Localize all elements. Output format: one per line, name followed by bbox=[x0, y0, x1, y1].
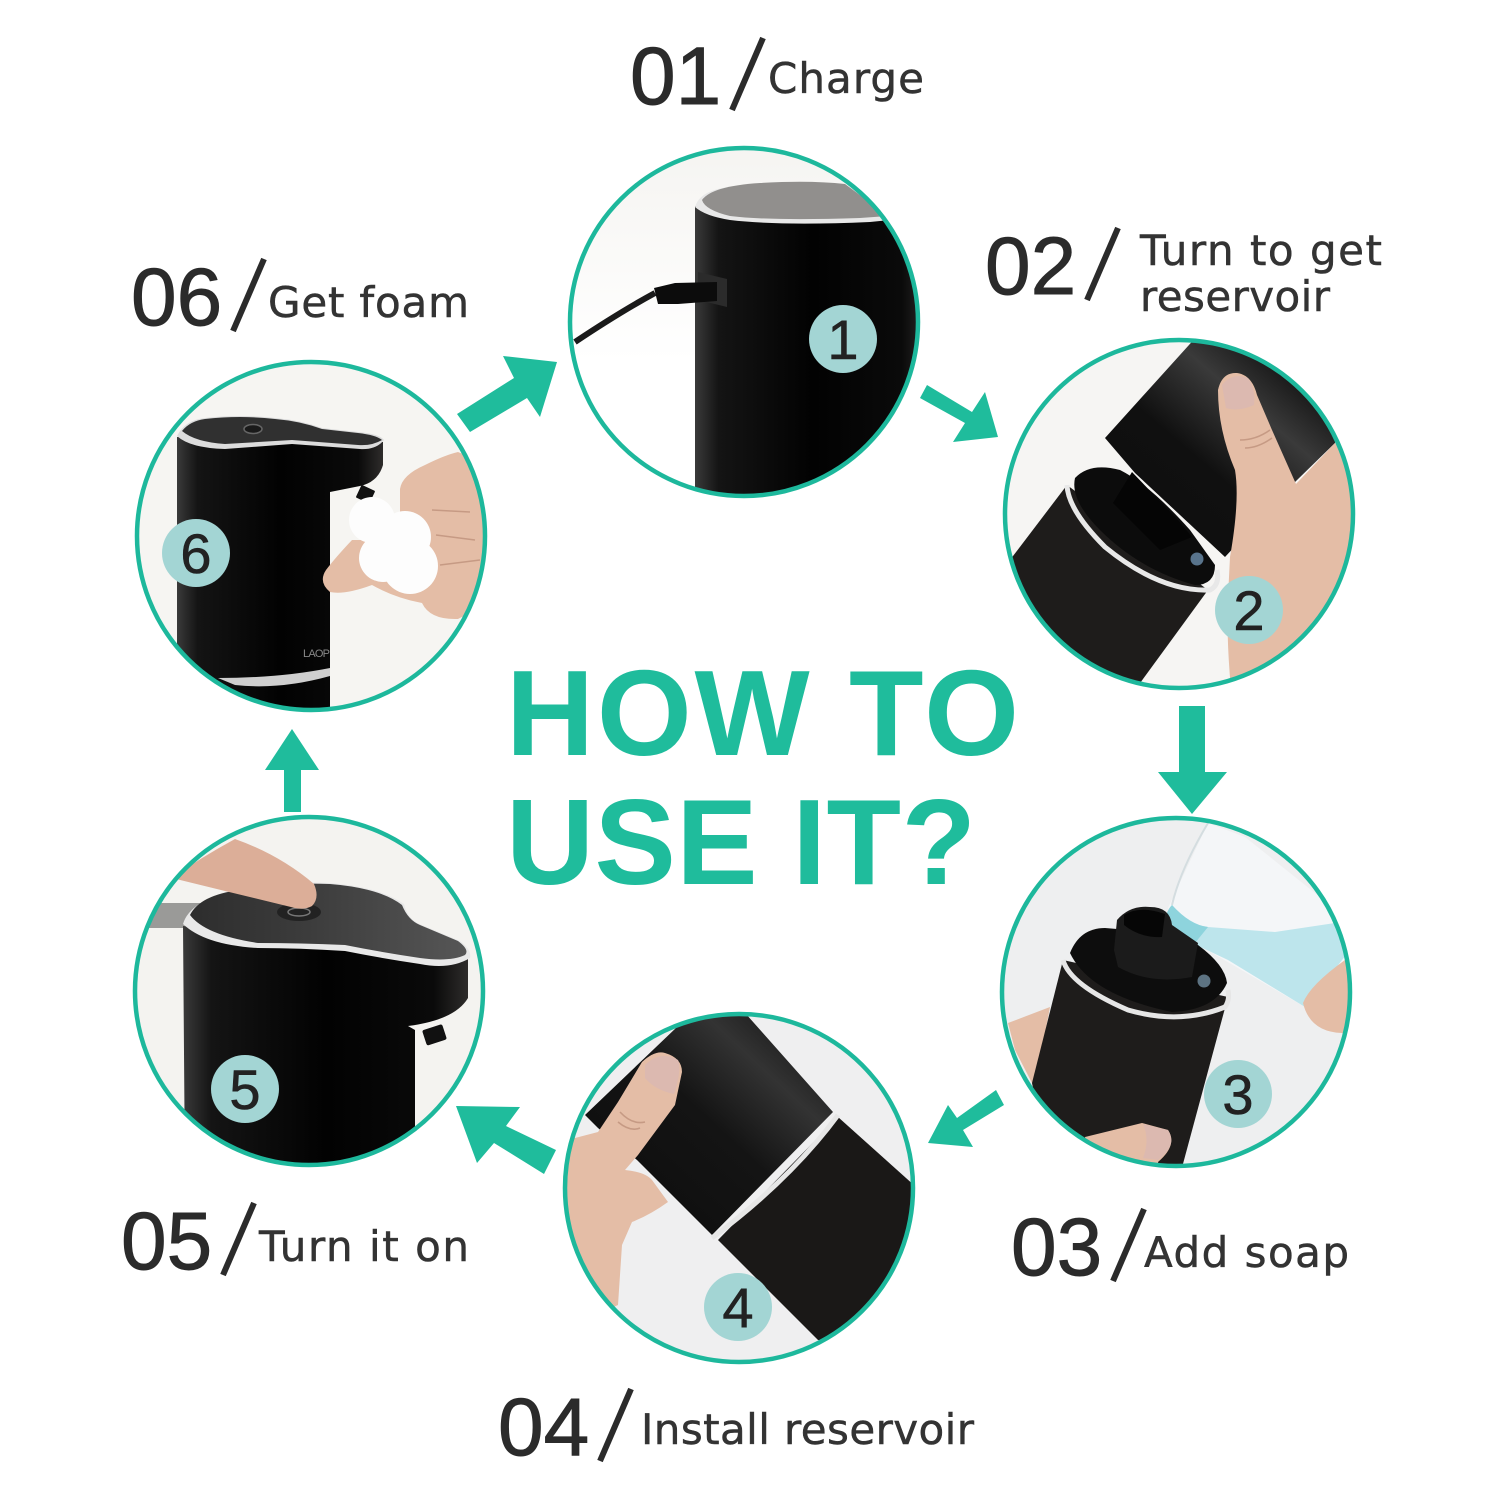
panel: step 3 add soap photo bbox=[1000, 815, 1360, 1175]
step 5 heading: 05 bbox=[121, 1196, 212, 1287]
arrow: step 4 to step 5 bbox=[456, 1106, 556, 1174]
step 6 heading bbox=[131, 252, 469, 343]
step 2 heading: 02 bbox=[985, 221, 1076, 312]
arrow: step 3 to step 4 bbox=[928, 1090, 1004, 1147]
step 2 heading bbox=[985, 221, 1382, 321]
title: how to use it bbox=[506, 645, 1019, 910]
title: how to use it: USE IT? bbox=[506, 774, 976, 910]
badge 4: 4 bbox=[722, 1276, 754, 1339]
badge 2 bbox=[1215, 576, 1283, 644]
step 4 heading: 04 bbox=[498, 1382, 589, 1473]
badge 6 bbox=[162, 519, 230, 587]
badge 3 bbox=[1204, 1060, 1272, 1128]
step 1 heading: Charge bbox=[768, 54, 924, 103]
step 4 heading: Install reservoir bbox=[641, 1405, 975, 1454]
step 1 heading bbox=[630, 31, 924, 122]
badge 1: 1 bbox=[827, 308, 859, 371]
step 4 heading bbox=[498, 1382, 975, 1473]
step 2 heading: reservoir bbox=[1140, 272, 1331, 321]
badge 4 bbox=[704, 1273, 772, 1341]
panel: step 5 turn on photo bbox=[130, 815, 490, 1180]
panel: step 4 install reservoir photo bbox=[555, 1005, 925, 1370]
step 3 heading: Add soap bbox=[1144, 1228, 1349, 1277]
arrow: step 6 to step 1 bbox=[457, 356, 557, 432]
badge 5: 5 bbox=[229, 1058, 261, 1121]
badge 3: 3 bbox=[1222, 1063, 1254, 1126]
arrow: step 2 to step 3 bbox=[1158, 706, 1227, 814]
title: how to use it: HOW TO bbox=[506, 645, 1019, 781]
logo text: LAOP bbox=[303, 648, 330, 660]
panel: step 1 charging photo bbox=[560, 140, 930, 510]
arrow: step 5 to step 6 bbox=[265, 729, 319, 812]
step 1 heading: 01 bbox=[630, 31, 721, 122]
step 5 heading: Turn it on bbox=[258, 1222, 469, 1271]
panel: step 2 reservoir photo bbox=[1000, 335, 1365, 700]
arrow: step 1 to step 2 bbox=[920, 385, 998, 442]
badge 1 bbox=[809, 305, 877, 373]
badge 2: 2 bbox=[1233, 579, 1265, 642]
step 2 heading: Turn to get bbox=[1139, 226, 1382, 275]
badge 6: 6 bbox=[180, 522, 212, 585]
step 6 heading: Get foam bbox=[268, 278, 469, 327]
panel: step 6 get foam photo bbox=[130, 355, 495, 715]
badge 5 bbox=[211, 1055, 279, 1123]
foam bbox=[349, 497, 438, 594]
step 3 heading: 03 bbox=[1011, 1202, 1102, 1293]
step 6 heading: 06 bbox=[131, 252, 222, 343]
step 5 heading bbox=[121, 1196, 469, 1287]
step 3 heading bbox=[1011, 1202, 1349, 1293]
